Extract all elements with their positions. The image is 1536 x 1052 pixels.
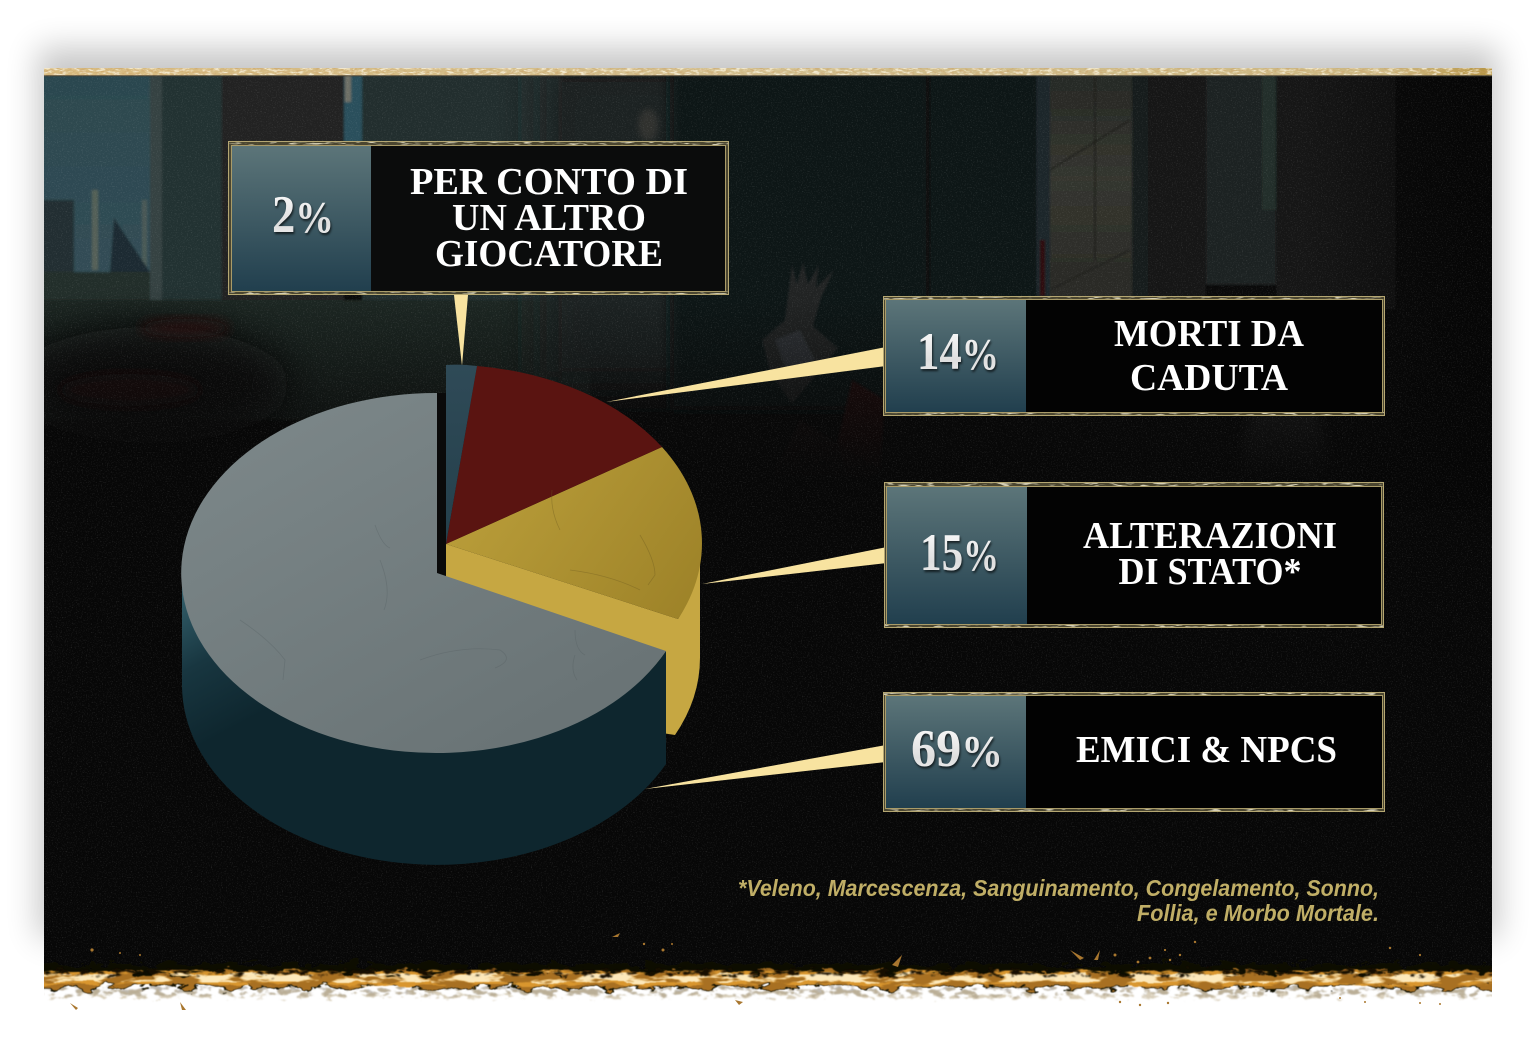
arrow: leader to 2% box xyxy=(454,295,468,366)
percent value: 14% xyxy=(917,323,999,381)
label text: EMICI & NPCS xyxy=(1076,729,1337,771)
label text: DI STATO* xyxy=(1118,551,1302,593)
scenery: stone pillars right xyxy=(934,76,1374,296)
label text: CADUTA xyxy=(1130,357,1289,399)
footnote: Follia, e Morbo Mortale. xyxy=(1137,900,1379,926)
torn gold bottom edge xyxy=(44,933,1492,1010)
percent value: 2% xyxy=(272,186,334,244)
footnote: *Veleno, Marcescenza, Sanguinamento, Congelamento, Sonno, xyxy=(738,875,1379,901)
slice: yellow side wall xyxy=(446,544,700,735)
panel: 14% callout box xyxy=(884,296,1384,416)
percent value: 15% xyxy=(920,524,999,582)
label text xyxy=(1083,515,1337,593)
label text: UN ALTRO xyxy=(452,197,646,239)
panel: 69% callout box xyxy=(884,692,1384,812)
slice: red 14% xyxy=(446,366,662,544)
percent value: 69% xyxy=(911,720,1003,778)
gold top edge xyxy=(44,68,1492,76)
scenery: castle interior left xyxy=(30,70,590,420)
label text: ALTERAZIONI xyxy=(1083,515,1337,557)
scenery: distant head xyxy=(638,109,658,141)
arrow: leader to 69% box xyxy=(645,745,886,789)
label text xyxy=(410,161,688,275)
footnote xyxy=(738,875,1379,926)
slice: blue 2% xyxy=(446,365,477,544)
chart: 3D pie chart xyxy=(181,365,702,865)
arrow: leader to 15% box xyxy=(702,547,887,584)
arrow: leader to 14% box xyxy=(606,347,886,402)
scenery: armored figure and hand xyxy=(763,264,883,420)
scenery: red stained rubble xyxy=(44,314,289,416)
label text: GIOCATORE xyxy=(435,233,663,275)
gap between slices xyxy=(437,393,446,579)
label text xyxy=(1114,313,1305,399)
slice: gray 69% xyxy=(181,393,666,753)
surface cracks xyxy=(240,525,585,680)
gold specks xyxy=(70,933,1441,1010)
panel: 15% callout box xyxy=(884,482,1384,628)
darkening fades xyxy=(44,332,1329,479)
slice: dark side wall 69% xyxy=(182,573,666,865)
label text: MORTI DA xyxy=(1114,313,1305,355)
panel: 2% callout box xyxy=(228,142,728,294)
label text: PER CONTO DI xyxy=(410,161,688,203)
slice: yellow 15% xyxy=(446,447,702,619)
